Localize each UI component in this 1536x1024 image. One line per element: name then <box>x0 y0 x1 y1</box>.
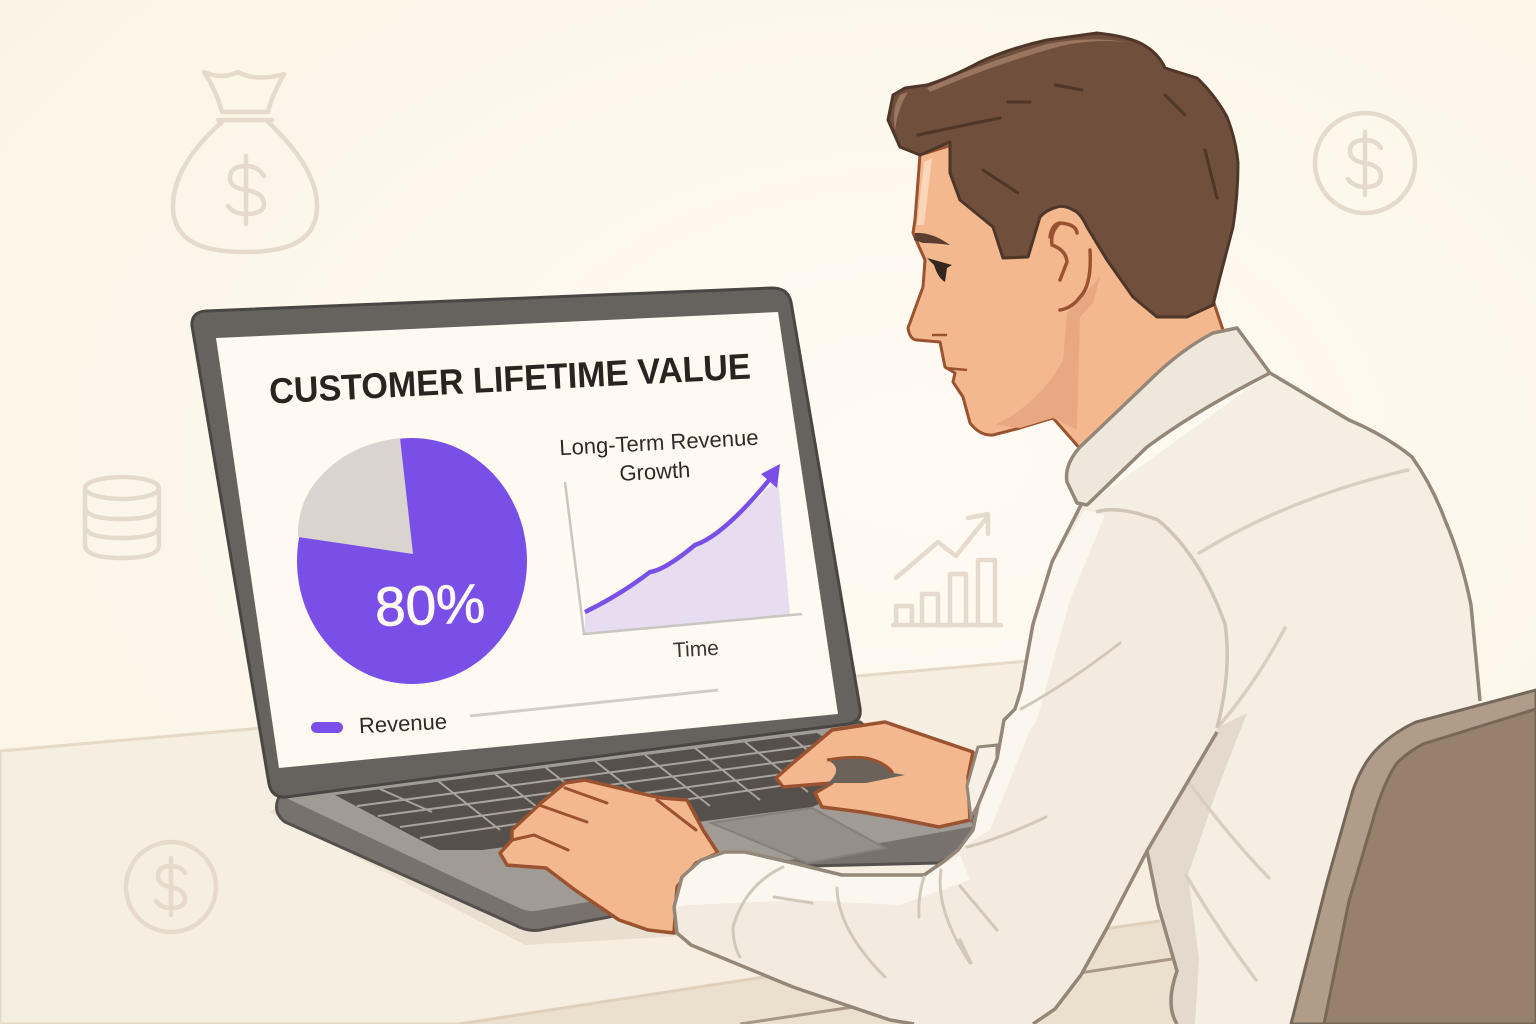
hair <box>888 33 1238 317</box>
laptop shadow on desk <box>270 790 700 945</box>
hand: right on keyboard <box>776 722 973 827</box>
pie chart <box>297 438 527 684</box>
desk <box>0 660 1240 1024</box>
sleeve arm <box>674 505 1228 1024</box>
eyebrow <box>914 233 950 245</box>
legend: revenue: Revenue <box>358 709 448 738</box>
screen <box>216 312 838 768</box>
icon: money bag <box>173 72 317 252</box>
keyboard <box>335 733 885 850</box>
person <box>888 33 1480 1024</box>
legend: revenue <box>311 690 718 738</box>
line chart: long-term revenue growth: Growth <box>619 457 691 486</box>
line chart: long-term revenue growth <box>559 425 802 662</box>
trackpad <box>711 808 885 863</box>
icon: dollar coin bottom left <box>126 842 216 932</box>
collar <box>1067 328 1270 505</box>
eye <box>927 258 952 282</box>
wrist cuff <box>967 745 997 817</box>
icon: database stack <box>85 477 159 558</box>
laptop base and keyboard <box>277 722 985 930</box>
icon: growth chart <box>893 514 1001 625</box>
hand: left on keyboard <box>500 780 718 933</box>
line chart: long-term revenue growth: Time <box>672 637 719 662</box>
laptop lid <box>192 288 860 797</box>
nose and mouth lines <box>932 335 967 370</box>
pie chart: 80% <box>374 572 486 638</box>
line chart: long-term revenue growth: Long-Term Revenue <box>559 425 759 460</box>
chair <box>1291 690 1536 1024</box>
forehead highlight <box>917 158 932 225</box>
icon: dollar coin top right <box>1315 113 1415 213</box>
screen title: CUSTOMER LIFETIME VALUE <box>268 345 752 412</box>
torso <box>1087 373 1480 1024</box>
neck and face <box>908 130 1235 460</box>
ear <box>1050 223 1090 310</box>
face shading <box>995 277 1100 430</box>
